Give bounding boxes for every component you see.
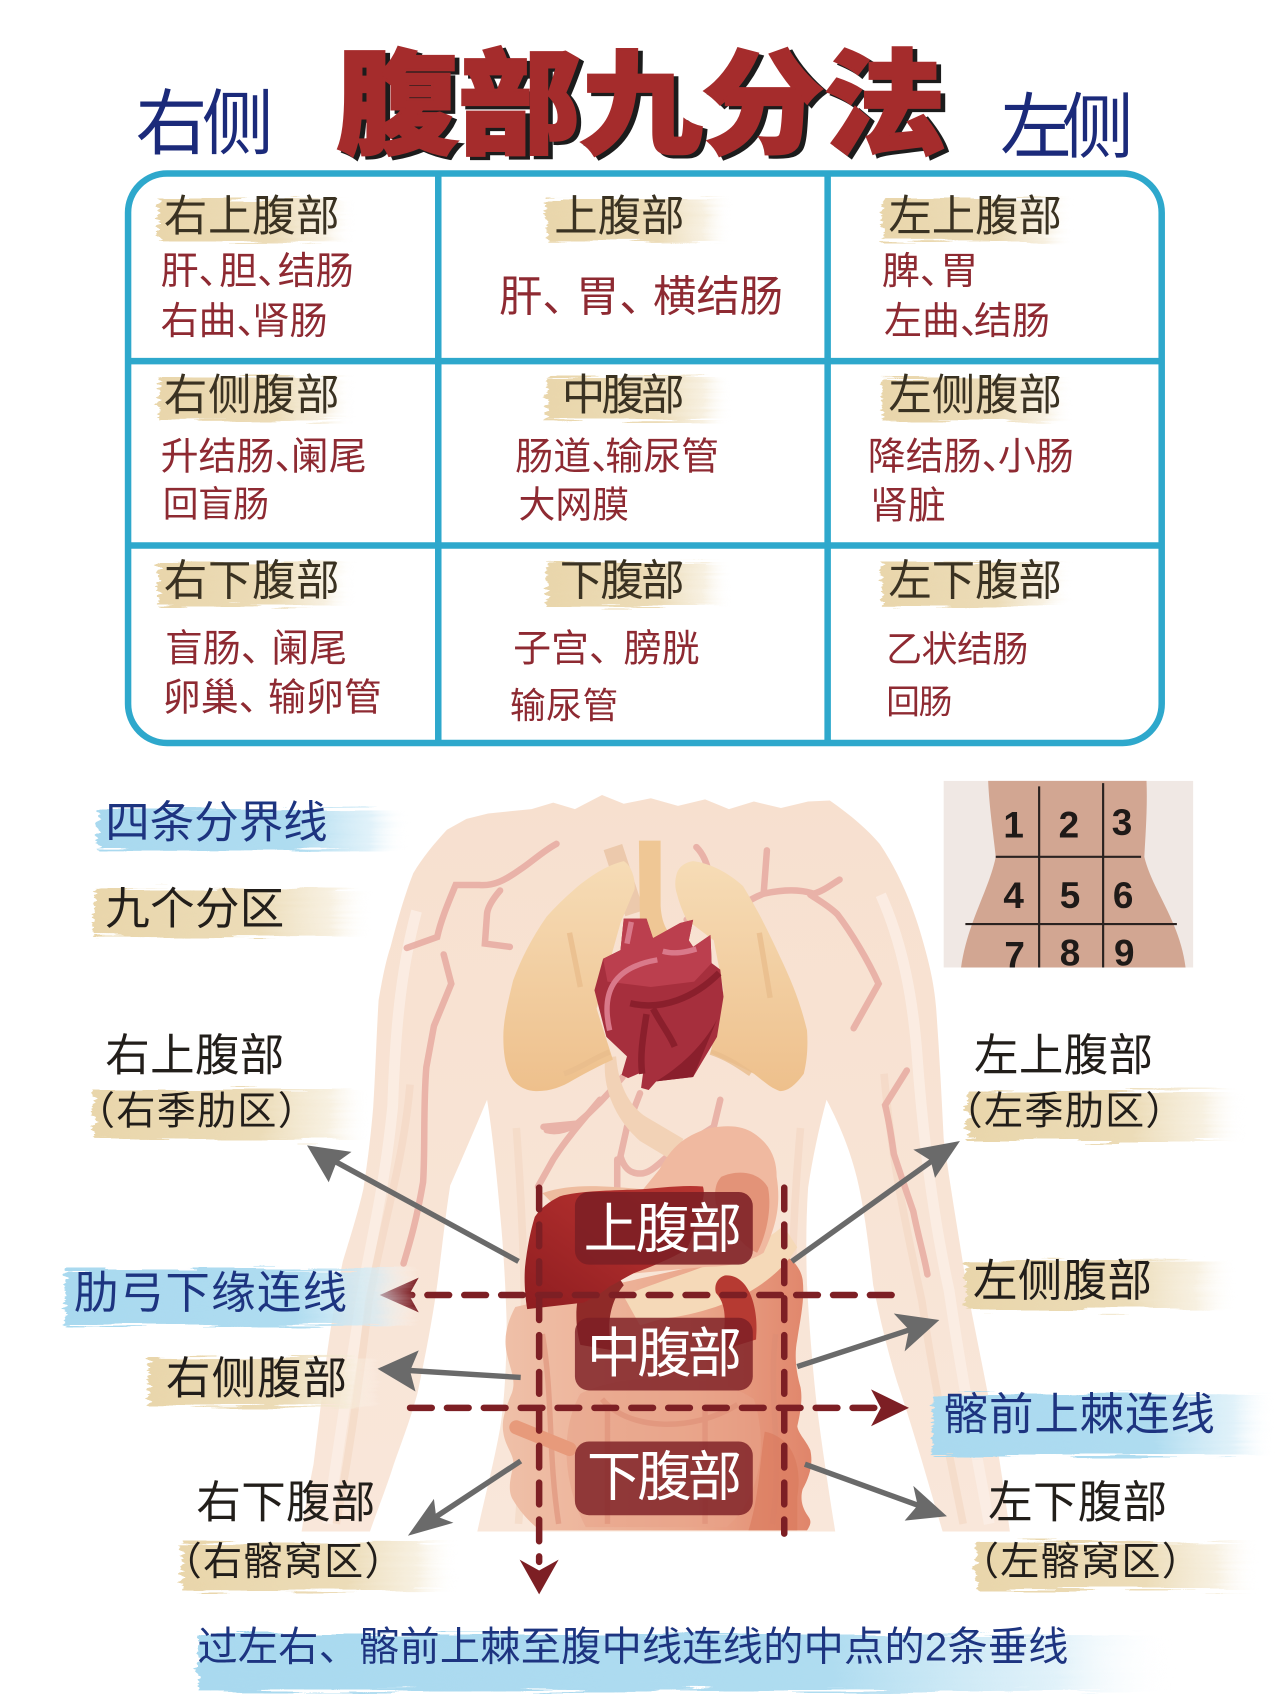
cell: hypogastric: 输尿管 [510, 686, 618, 726]
cell: right upper: 肝、胆、结肠 [161, 251, 354, 293]
cell: left upper [882, 193, 1072, 343]
label: right iliac [163, 1478, 458, 1591]
right lung [675, 861, 807, 1091]
cell: right upper [158, 193, 354, 343]
numbers: 4 [1003, 875, 1024, 916]
label: left lumbar [965, 1257, 1237, 1309]
cell: right lower: 盲肠、阑尾 [165, 629, 347, 671]
label: right side: 右侧 [136, 85, 273, 165]
cell: umbilical: 大网膜 [519, 484, 629, 525]
numbers: 3 [1112, 802, 1132, 843]
cell: right upper: 右上腹部 [164, 193, 340, 241]
numbers: 1 [1003, 804, 1024, 845]
lung folds [564, 933, 770, 1074]
numbers [1003, 802, 1134, 975]
label: interspinous line [933, 1391, 1274, 1456]
label: left hypochondriac: （左季肋区） [944, 1091, 1184, 1134]
region label: hypogastric: 下腹部 [587, 1448, 742, 1508]
grid lines [965, 783, 1177, 967]
descending colon shade [748, 1432, 799, 1530]
cell: right lower [158, 557, 382, 719]
region label: epigastric: 上腹部 [584, 1199, 742, 1259]
cell: hypogastric: 子宫、膀胱 [513, 629, 700, 671]
cell: left upper: 左曲、结肠 [884, 301, 1050, 343]
gallbladder lobe behind liver [542, 1186, 651, 1215]
cell: right lateral: 右侧腹部 [164, 372, 340, 420]
numbers: 7 [1004, 934, 1025, 975]
label: left side: 左侧 [1000, 88, 1133, 168]
cell: epigastric: 上腹部 [554, 193, 684, 241]
trachea [639, 841, 683, 949]
label: four boundary lines: 四条分界线 [105, 798, 328, 847]
cell: umbilical: 肠道、输尿管 [515, 437, 719, 479]
pancreas [624, 1226, 797, 1325]
anatomy illustration [302, 795, 1010, 1531]
gray pointer arrows [307, 1141, 960, 1536]
upper airway band [613, 847, 635, 913]
label: nine regions [94, 885, 371, 937]
stomach [624, 1126, 778, 1274]
label: left hypochondriac [944, 1032, 1244, 1141]
liver [525, 1186, 704, 1309]
heart: coronary bands [630, 973, 719, 1074]
body silhouette [302, 795, 1010, 1531]
label: right iliac: 右下腹部 [196, 1478, 375, 1527]
numbers: 8 [1060, 932, 1080, 973]
cell: left lower: 回肠 [886, 685, 952, 722]
label: right hypochondriac [76, 1032, 370, 1140]
cell: right lateral: 升结肠、阑尾 [161, 437, 367, 479]
label: left iliac: 左下腹部 [988, 1478, 1167, 1527]
arrowheads [307, 1141, 960, 1536]
esophagus [605, 1056, 683, 1161]
cell: left lower: 左下腹部 [888, 557, 1062, 605]
label: left iliac [960, 1478, 1258, 1590]
label: left iliac: （左髂窝区） [960, 1541, 1201, 1584]
heart: right chamber tint [603, 919, 712, 987]
cell: right lateral [158, 372, 367, 524]
label: nine regions: 九个分区 [105, 885, 284, 934]
label: subcostal line: 肋弓下缘连线 [74, 1269, 347, 1318]
label: two vertical lines note [197, 1625, 1174, 1691]
label: interspinous line: 髂前上棘连线 [944, 1391, 1215, 1440]
photo inset: numbered abdomen [944, 781, 1193, 975]
title: 腹部九分法 [341, 46, 950, 172]
cell: epigastric [499, 193, 783, 321]
numbers: 2 [1059, 804, 1079, 845]
dashed boundary lines [380, 1188, 909, 1594]
cell: hypogastric [510, 557, 731, 726]
label: four boundary lines [98, 798, 407, 850]
cell: umbilical: 中腹部 [562, 372, 684, 420]
heart [594, 919, 724, 1090]
small intestine folds [567, 1378, 761, 1527]
nine-region table [128, 174, 1162, 743]
cell: right lower: 卵巢、输卵管 [163, 677, 382, 719]
label: right lumbar: 右侧腹部 [166, 1355, 347, 1404]
cell: hypogastric: 下腹部 [560, 557, 684, 605]
cell: right lateral: 回盲肠 [163, 484, 269, 524]
heart: highlights [607, 922, 696, 1030]
table grid [128, 174, 1162, 743]
label: left lumbar: 左侧腹部 [973, 1257, 1152, 1306]
colon and small intestine [503, 1249, 811, 1530]
cell: left lower [882, 557, 1072, 722]
label: two vertical lines note: 过左右、髂前上棘至腹中线连线的中点的2条垂线 [197, 1625, 1068, 1670]
numbers: 5 [1060, 875, 1080, 916]
numbers: 9 [1114, 932, 1134, 973]
cell: left upper: 脾、胃 [882, 251, 978, 293]
cell: left lateral: 肾脏 [870, 485, 946, 527]
label: right iliac: （右髂窝区） [163, 1541, 404, 1584]
label: right hypochondriac: （右季肋区） [76, 1091, 317, 1134]
cell: left lower: 乙状结肠 [886, 630, 1028, 670]
left lung [503, 861, 635, 1091]
region label: umbilical: 中腹部 [587, 1324, 742, 1384]
numbers: 6 [1113, 875, 1133, 916]
cell: right lower: 右下腹部 [164, 557, 340, 605]
blood vessels [404, 844, 927, 1274]
label: right hypochondriac: 右上腹部 [105, 1032, 284, 1081]
kidneys [576, 1271, 624, 1350]
arm and torso shading [328, 895, 989, 1524]
cell: left lateral: 降结肠、小肠 [868, 437, 1074, 479]
label: subcostal line [65, 1269, 418, 1325]
cell: right upper: 右曲、肾肠 [161, 301, 328, 343]
stomach inner fold [715, 1173, 769, 1253]
label: left hypochondriac: 左上腹部 [974, 1032, 1153, 1081]
cell: umbilical [515, 372, 731, 525]
arrowheads [380, 1278, 909, 1594]
cell: left upper: 左上腹部 [888, 193, 1062, 241]
cell: left lateral [868, 372, 1074, 527]
title: 腹部九分法 [336, 42, 946, 168]
cecum and appendix [516, 1427, 570, 1449]
cell: left lateral: 左侧腹部 [888, 372, 1062, 420]
cell: epigastric: 肝、胃、横结肠 [499, 273, 783, 321]
